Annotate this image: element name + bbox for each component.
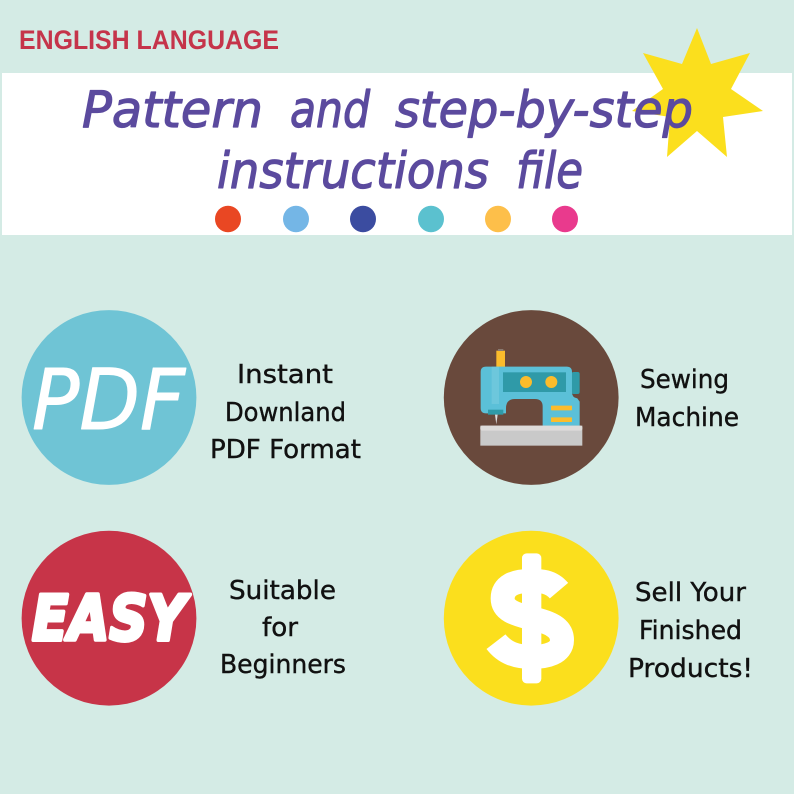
text: suitable for beginners [220,576,346,680]
icon: sewing machine badge [444,310,619,485]
title: instructions [217,142,489,200]
text: instant download: Downland [225,398,346,428]
text: instant download: PDF Format [210,435,361,465]
text: suitable for beginners: Suitable [229,576,336,606]
text: sewing machine [635,365,739,433]
text: sell your finished products: Sell Your [635,578,747,608]
text: sell your finished products: Finished [639,616,742,646]
text: sewing machine: Machine [635,403,739,433]
title: step-by-step [395,81,693,139]
text: sell your finished products [628,578,753,684]
title [82,81,693,200]
icon: EASY badge: EASY [32,582,191,655]
language label: ENGLISH LANGUAGE [19,25,279,55]
icon: yellow star [632,28,763,157]
white title banner [2,73,792,235]
icon: PDF badge [22,310,196,485]
title: file [516,142,583,200]
title: and [290,81,370,139]
text: instant download: Instant [237,360,333,390]
text: instant download [210,360,361,465]
title: Pattern [82,81,263,139]
decorative colour dots [215,206,578,232]
icon: dollar badge [444,531,619,706]
text: suitable for beginners: for [262,613,299,643]
icon: EASY badge [22,531,196,706]
text: sewing machine: Sewing [640,365,729,395]
text: sell your finished products: Products! [628,654,753,684]
text: suitable for beginners: Beginners [220,650,346,680]
icon: PDF badge: PDF [32,351,187,449]
